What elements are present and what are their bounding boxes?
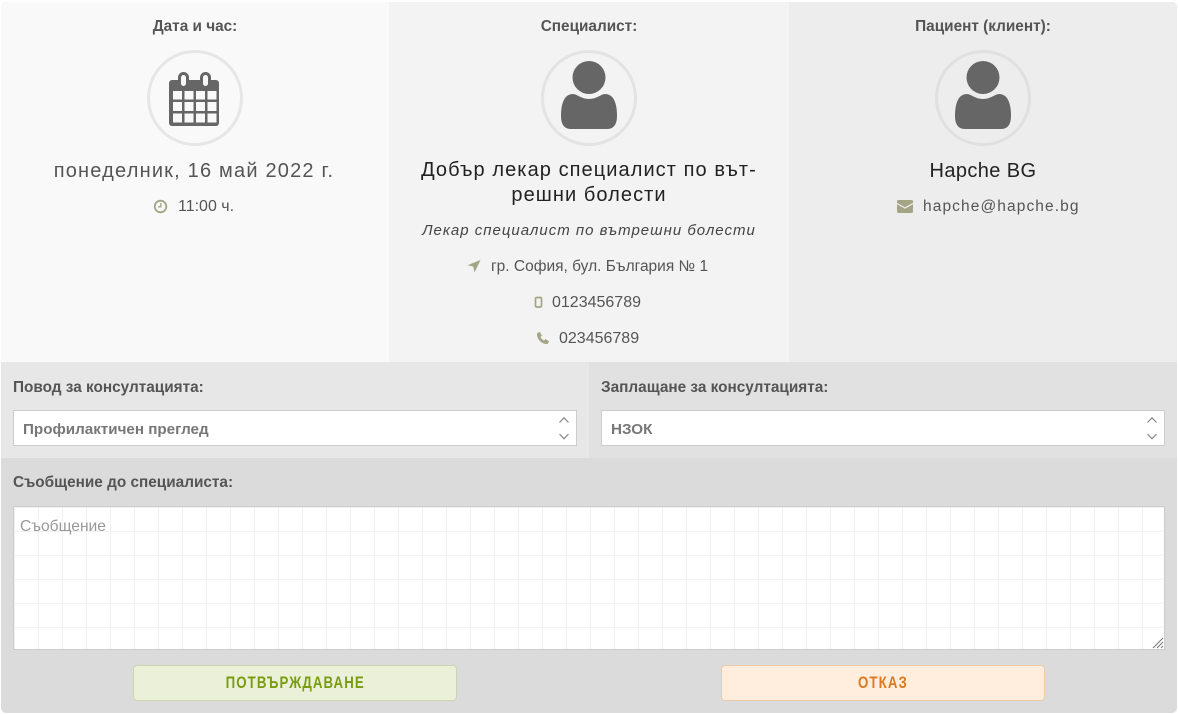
label: payment: Заплащане за консултацията: — [601, 379, 828, 396]
icon: envelope — [897, 200, 913, 213]
icon: mobile phone — [534, 296, 542, 308]
textarea: message — [13, 506, 1165, 650]
icon: location arrow — [468, 260, 480, 272]
specialist name: решни болести — [511, 184, 667, 206]
icon: specialist avatar — [541, 50, 637, 146]
time row — [154, 198, 234, 215]
time text: 11:00 ч. — [178, 198, 234, 215]
button: confirm: ПОТВЪРЖДАВАНЕ — [225, 673, 365, 692]
panel: date and time background — [1, 2, 389, 362]
panel: patient background — [789, 2, 1177, 362]
icon: select arrows — [559, 417, 569, 440]
icon: calendar — [147, 50, 243, 146]
icon: select arrows — [1147, 417, 1157, 440]
button: cancel: ОТКАЗ — [858, 673, 908, 692]
select: reason — [13, 410, 577, 446]
button: cancel — [721, 665, 1045, 701]
heading: patient: Пациент (клиент): — [915, 18, 1051, 35]
select value: reason: Профилактичен преглед — [23, 421, 209, 438]
label: message: Съобщение до специалиста: — [13, 474, 233, 491]
panel: specialist background — [389, 2, 789, 362]
button: confirm — [133, 665, 457, 701]
phone row — [537, 330, 639, 347]
placeholder text: Съобщение — [20, 518, 106, 535]
mobile number: 0123456789 — [552, 294, 641, 311]
heading: date and time: Дата и час: — [153, 18, 237, 35]
address text: гр. София, бул. България № 1 — [491, 258, 708, 275]
specialist name: Добър лекар специалист по вът- — [421, 159, 757, 181]
phone number: 023456789 — [559, 330, 639, 347]
panel: patient — [897, 18, 1080, 215]
mobile row — [534, 294, 641, 311]
panel: payment background — [589, 362, 1177, 458]
heading: specialist: Специалист: — [541, 18, 637, 35]
address row — [468, 258, 708, 275]
panel: reason background — [1, 362, 589, 458]
icon: resize handle — [1152, 638, 1164, 648]
icon: clock — [154, 200, 168, 214]
panel: specialist — [421, 18, 757, 347]
specialist name — [421, 159, 757, 206]
icon: telephone — [537, 332, 550, 344]
select value: payment: НЗОК — [611, 421, 652, 438]
email text: hapche@hapche.bg — [923, 198, 1080, 215]
date text: понеделник, 16 май 2022 г. — [54, 160, 334, 182]
panel: date and time — [54, 18, 334, 215]
icon: patient avatar — [935, 50, 1031, 146]
label: reason: Повод за консултацията: — [13, 379, 204, 396]
patient name: Hapche BG — [930, 160, 1036, 182]
email row — [897, 198, 1080, 215]
select: payment — [601, 410, 1165, 446]
specialist role: Лекар специалист по вътрешни болести — [422, 222, 756, 239]
